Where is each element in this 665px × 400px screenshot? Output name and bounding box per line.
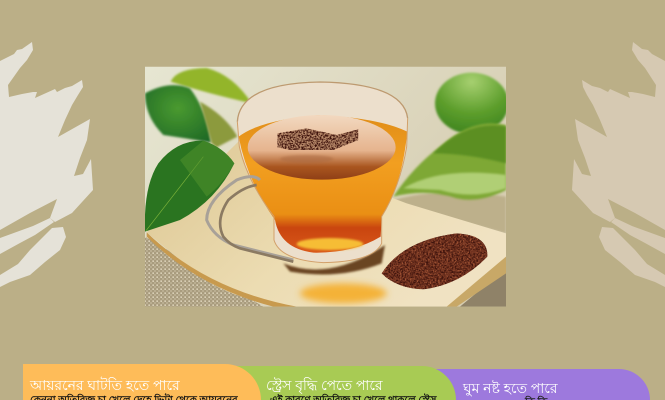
cup shadow xyxy=(283,245,385,274)
right brush stroke decoration xyxy=(572,42,665,287)
rooibos tea pile xyxy=(380,232,490,292)
heading: sleep: ঘুম নষ্ট হতে পারে xyxy=(463,380,557,396)
left brush stroke decoration xyxy=(0,42,93,287)
heading: iron: আয়রনের ঘাটতি হতে পারে xyxy=(30,377,180,393)
glass cup xyxy=(237,82,408,263)
leaves xyxy=(171,68,252,103)
wooden board xyxy=(147,140,506,307)
panel: iron deficiency (orange) xyxy=(23,364,261,400)
photo: cup of red tea on wooden board xyxy=(145,66,506,306)
tea leaves floating xyxy=(277,128,358,150)
glass rim xyxy=(237,82,408,122)
tea liquid xyxy=(239,115,407,253)
cup handle xyxy=(207,177,293,260)
photo background cloth xyxy=(145,67,506,307)
panel: stress (green) xyxy=(200,366,456,400)
heading: stress: স্ট্রেস বৃদ্ধি পেতে পারে xyxy=(266,377,383,393)
panel: sleep loss (purple) xyxy=(350,369,650,400)
